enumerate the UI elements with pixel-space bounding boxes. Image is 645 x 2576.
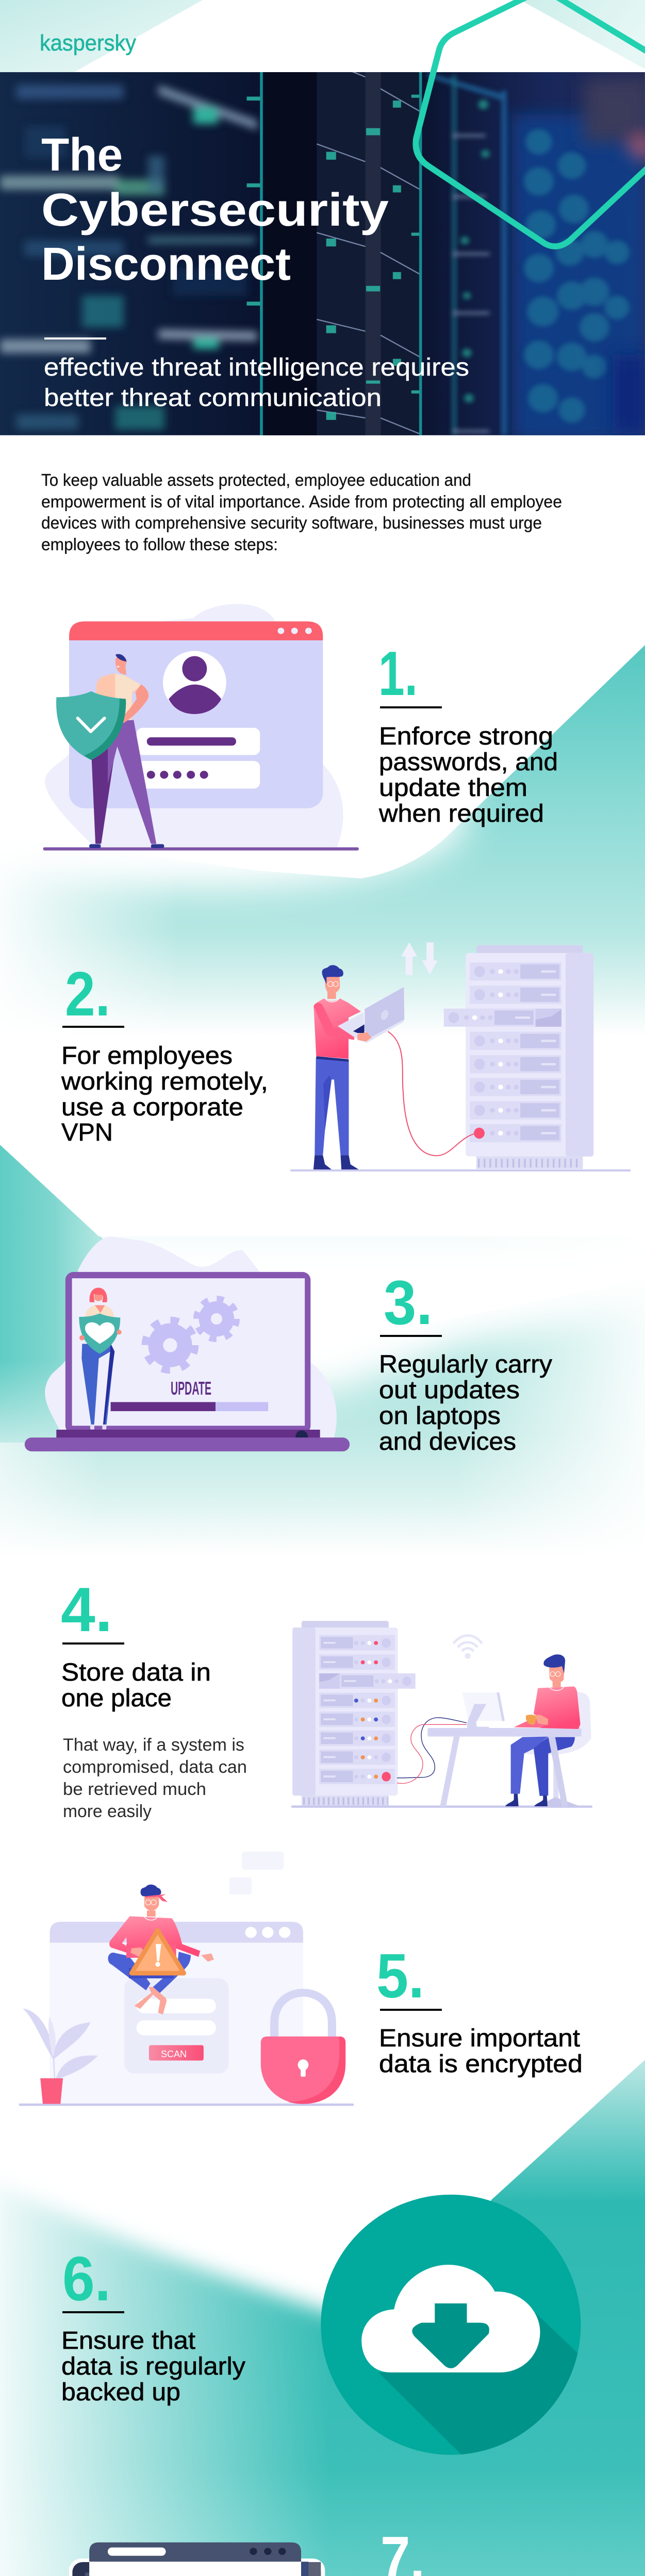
heading: step 6 (61, 2244, 245, 2406)
man's legs (89, 720, 164, 848)
laptop (25, 1272, 350, 1451)
heading: step 2: VPN (61, 1119, 113, 1146)
intro paragraph: To keep valuable assets protected, employee education and (41, 470, 471, 489)
hero: blurred right side with bokeh (428, 73, 645, 442)
heading: step 3: out updates (379, 1377, 520, 1404)
heading: step 5: 5. (376, 1941, 424, 2011)
heading: step 6: data is regularly (61, 2353, 245, 2380)
heading: step 2: working remotely, (61, 1068, 268, 1095)
background: teal wave behind step 3 (0, 1145, 645, 1556)
cable (388, 1031, 479, 1156)
label: update: UPDATE (171, 1378, 211, 1399)
text block: step 4 body: be retrieved much (63, 1780, 206, 1799)
server rack (444, 945, 593, 1169)
background: teal wave behind steps 6 to 8 (0, 2009, 645, 2576)
heading: step 5: Ensure important (379, 2025, 580, 2052)
background: top corner shapes (0, 0, 645, 72)
panel: step 5 illustration (19, 1852, 354, 2106)
text block: step 4 body: That way, if a system is (63, 1735, 244, 1755)
title: Disconnect (41, 239, 291, 290)
password window (89, 2543, 301, 2576)
panel: step 1 illustration (43, 604, 359, 851)
intro paragraph (41, 470, 562, 554)
icon: wifi (453, 1635, 482, 1657)
heading: step 6: Ensure that (61, 2327, 195, 2354)
heading: step 3: Regularly carry (379, 1351, 552, 1378)
heading: step 1 (378, 638, 558, 827)
label: scan: SCAN (161, 2049, 187, 2059)
man and shield (56, 654, 148, 760)
login window blob (45, 604, 343, 847)
subtitle (44, 354, 469, 412)
text block: step 4 body: more easily (63, 1802, 152, 1821)
hero: central rack (247, 57, 422, 435)
title: The (41, 129, 123, 181)
hexagon outline (416, 0, 645, 246)
subtitle: better threat communication (44, 384, 382, 412)
heading: step 5: data is encrypted (379, 2050, 583, 2078)
heading: step 3: on laptops (379, 1402, 501, 1430)
intro paragraph: employees to follow these steps: (41, 535, 278, 554)
text block: step 4 body (63, 1735, 247, 1821)
heading: step 1: 1. (378, 638, 418, 708)
heading: step 6: 6. (62, 2244, 111, 2314)
heading: step 4 (61, 1574, 211, 1712)
background: teal wave behind steps 1 and 2 (0, 567, 645, 1041)
man's legs (313, 1058, 359, 1170)
heading: step 4: Store data in (61, 1659, 211, 1686)
panel: step 2 illustration (290, 942, 631, 1172)
man's hair (543, 1654, 565, 1673)
heading: step 1: Enforce strong (379, 723, 553, 750)
man with warning sign (108, 1885, 214, 2014)
heading: step 4: 4. (61, 1574, 112, 1645)
man with laptop (313, 965, 404, 1060)
subtitle: effective threat intelligence requires (44, 354, 469, 381)
heading: step 4: one place (61, 1685, 172, 1712)
heading: step 2: use a corporate (61, 1094, 243, 1121)
title (41, 129, 389, 290)
browser window (50, 1922, 303, 2104)
logo: top: kaspersky (40, 30, 136, 56)
icon: cloud download circle (321, 2195, 584, 2458)
desk and man (397, 1666, 591, 1807)
icon: padlock (261, 1993, 345, 2104)
server rack (292, 1621, 416, 1806)
heading: step 1: passwords, and (379, 749, 558, 776)
login window (69, 621, 323, 808)
hero divider (44, 337, 106, 340)
intro paragraph: empowerment is of vital importance. Aside from protecting all employee (41, 492, 562, 511)
text block: step 4 body: compromised, data can (63, 1757, 247, 1777)
heading: step 2: For employees (61, 1042, 233, 1070)
panel: step 4 illustration (291, 1621, 592, 1808)
laptop blob (45, 1236, 337, 1437)
heading: step 5 (376, 1941, 583, 2078)
heading: step 6: backed up (61, 2379, 180, 2406)
heading: step 1: when required (378, 800, 544, 827)
heading: step 2 (61, 959, 268, 1146)
heading: step 1: update them (379, 774, 527, 802)
gears and woman with shield (79, 1287, 237, 1430)
panel: step 3 illustration (25, 1236, 350, 1451)
hero image: blurred server room (0, 57, 645, 442)
panel: step 7 illustration (50, 2543, 343, 2576)
title: Cybersecurity (41, 184, 389, 236)
icon: plant (23, 2008, 98, 2104)
heading: step 3: 3. (384, 1267, 433, 1337)
heading: step 2: 2. (65, 959, 110, 1029)
heading: step 3 (379, 1267, 552, 1455)
intro paragraph: devices with comprehensive security software, businesses must urge (41, 513, 542, 532)
arrows: up and down (401, 942, 438, 975)
heading: step 3: and devices (379, 1428, 516, 1455)
